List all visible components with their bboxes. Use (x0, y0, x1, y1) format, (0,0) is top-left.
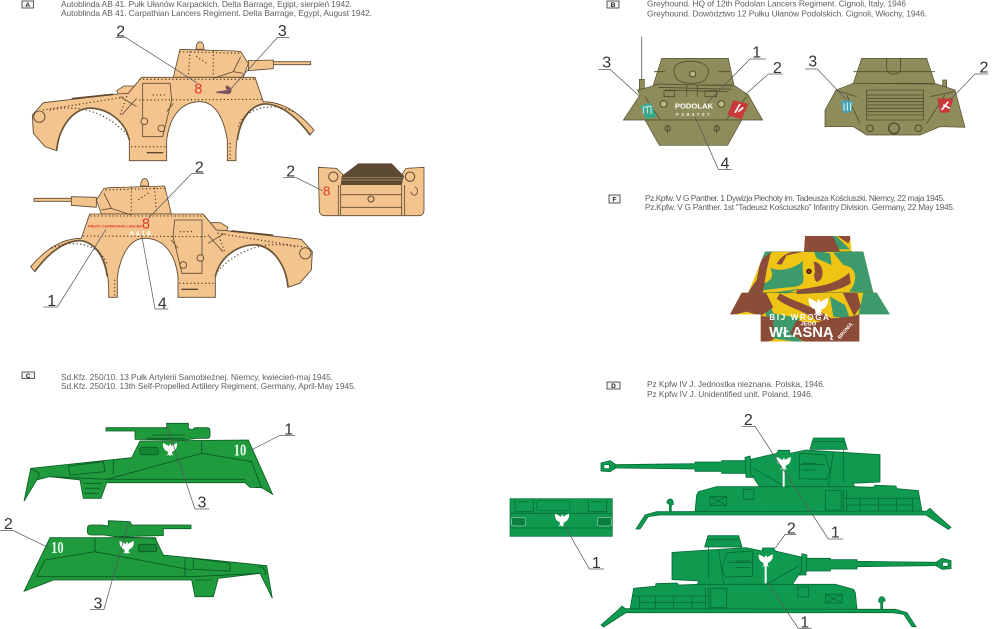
Greyhound, rear view: 3 (808, 54, 817, 71)
panel: A - Autoblinda AB 41 (22, 0, 424, 312)
Panther camouflage front view: BIJ WROGA (769, 313, 831, 322)
armoured car, rear view (283, 163, 424, 216)
panel label B: B (611, 2, 616, 9)
heading C: Sd.Kfz. 250/10. 13th Self-Propelled Artillery Regiment. Germany, April-May 1945. (61, 381, 356, 391)
halftrack, lower view: 10 (51, 539, 64, 558)
Panther camouflage front view: JEGO (800, 322, 817, 328)
armoured car, upper view: 2 (116, 23, 125, 40)
armoured car, lower view: PRUTO CARPATHIAN LANCER (88, 225, 142, 229)
armoured car, rear view: 2 (286, 163, 295, 180)
panel: C - Sd.Kfz. 250/10 (0, 372, 356, 612)
panel label B (607, 1, 619, 9)
armoured car, lower view: A 4 1 8 (129, 230, 151, 237)
panel label C (22, 372, 34, 380)
Greyhound, front view: 3 (602, 54, 611, 71)
halftrack, upper view: 3 (198, 495, 207, 512)
halftrack, lower view: 2 (4, 516, 13, 533)
armoured car, rear view: 8 (323, 183, 330, 198)
tank, lower view (601, 521, 951, 629)
armoured car, lower view: 2 (195, 160, 204, 177)
halftrack, lower view (0, 516, 272, 612)
armoured car, lower view: 1 (47, 293, 56, 310)
panel label F (609, 195, 620, 204)
heading C: Sd.Kfz. 250/10. 13 Pułk Artylerii Samobieżnej. Niemcy, kwiecień-maj 1945. (61, 372, 333, 382)
Panther camouflage front view: WŁASNĄ (769, 325, 834, 341)
heading F: Pz.Kpfw. V G Panther. 1 Dywizja Piechoty im. Tadeusza Kościuszki. Niemcy, 22 maja 1945. (645, 193, 945, 203)
Greyhound, rear view: 2 (980, 60, 989, 77)
panel label F: F (613, 196, 617, 204)
Panther camouflage front view (727, 233, 893, 343)
panel: F - Panther (609, 193, 955, 343)
panel label D (607, 382, 620, 390)
heading D: Pz Kpfw IV J. Unidentified unit. Poland, 1946. (647, 389, 813, 399)
halftrack, upper view (24, 421, 295, 512)
Greyhound, front view: F284707 (676, 112, 712, 118)
Panther camouflage front view: BRONIĄ (837, 321, 854, 341)
halftrack, upper view: 10 (234, 442, 246, 460)
panel: D - Pz Kpfw IV J (510, 379, 951, 629)
tank, upper view (601, 412, 951, 542)
heading D: Pz Kpfw IV J. Jednostka nieznana. Polska, 1946. (647, 379, 825, 389)
panel: B - Greyhound (598, 0, 989, 173)
Greyhound, rear view (805, 54, 989, 135)
armoured car, lower view: 4 (158, 295, 167, 312)
halftrack, lower view: 3 (94, 595, 103, 612)
Greyhound, front view: 1 (752, 44, 761, 61)
Greyhound, front view: 4 (721, 156, 730, 173)
armoured car, upper view: 8 (194, 81, 202, 97)
tank rear plate (510, 499, 612, 572)
tank, lower view: 2 (787, 521, 796, 538)
armoured car, lower view (31, 160, 312, 312)
panel label D: D (611, 383, 616, 390)
halftrack, upper view: 1 (284, 421, 293, 438)
armoured car, lower view: 8 (142, 217, 150, 233)
tank, upper view: 2 (744, 412, 753, 429)
Greyhound, front view: PODOLAK (675, 102, 714, 111)
armoured car, upper view: 3 (278, 23, 287, 40)
tank, upper view: 1 (831, 525, 840, 542)
heading A: Autoblinda AB 41. Carpathian Lancers Regiment. Delta Barrage, Egypt, August 1942. (61, 8, 372, 18)
Greyhound, front view (598, 37, 783, 173)
panel label A (22, 1, 34, 9)
heading F: Pz.Kpfw. V G Panther. 1st “Tadeusz Kościuszko” Infantry Division. Germany, 22 May 1945. (645, 202, 955, 212)
Greyhound, front view: 2 (773, 60, 782, 77)
heading B: Greyhound. Dowództwo 12 Pułku Ułanów Podolskich. Cignoli, Włochy, 1946. (647, 8, 927, 18)
panel label A: A (25, 2, 30, 9)
tank rear plate: 1 (592, 555, 601, 572)
panel label C: C (26, 373, 31, 380)
armoured car, upper view (32, 23, 314, 161)
